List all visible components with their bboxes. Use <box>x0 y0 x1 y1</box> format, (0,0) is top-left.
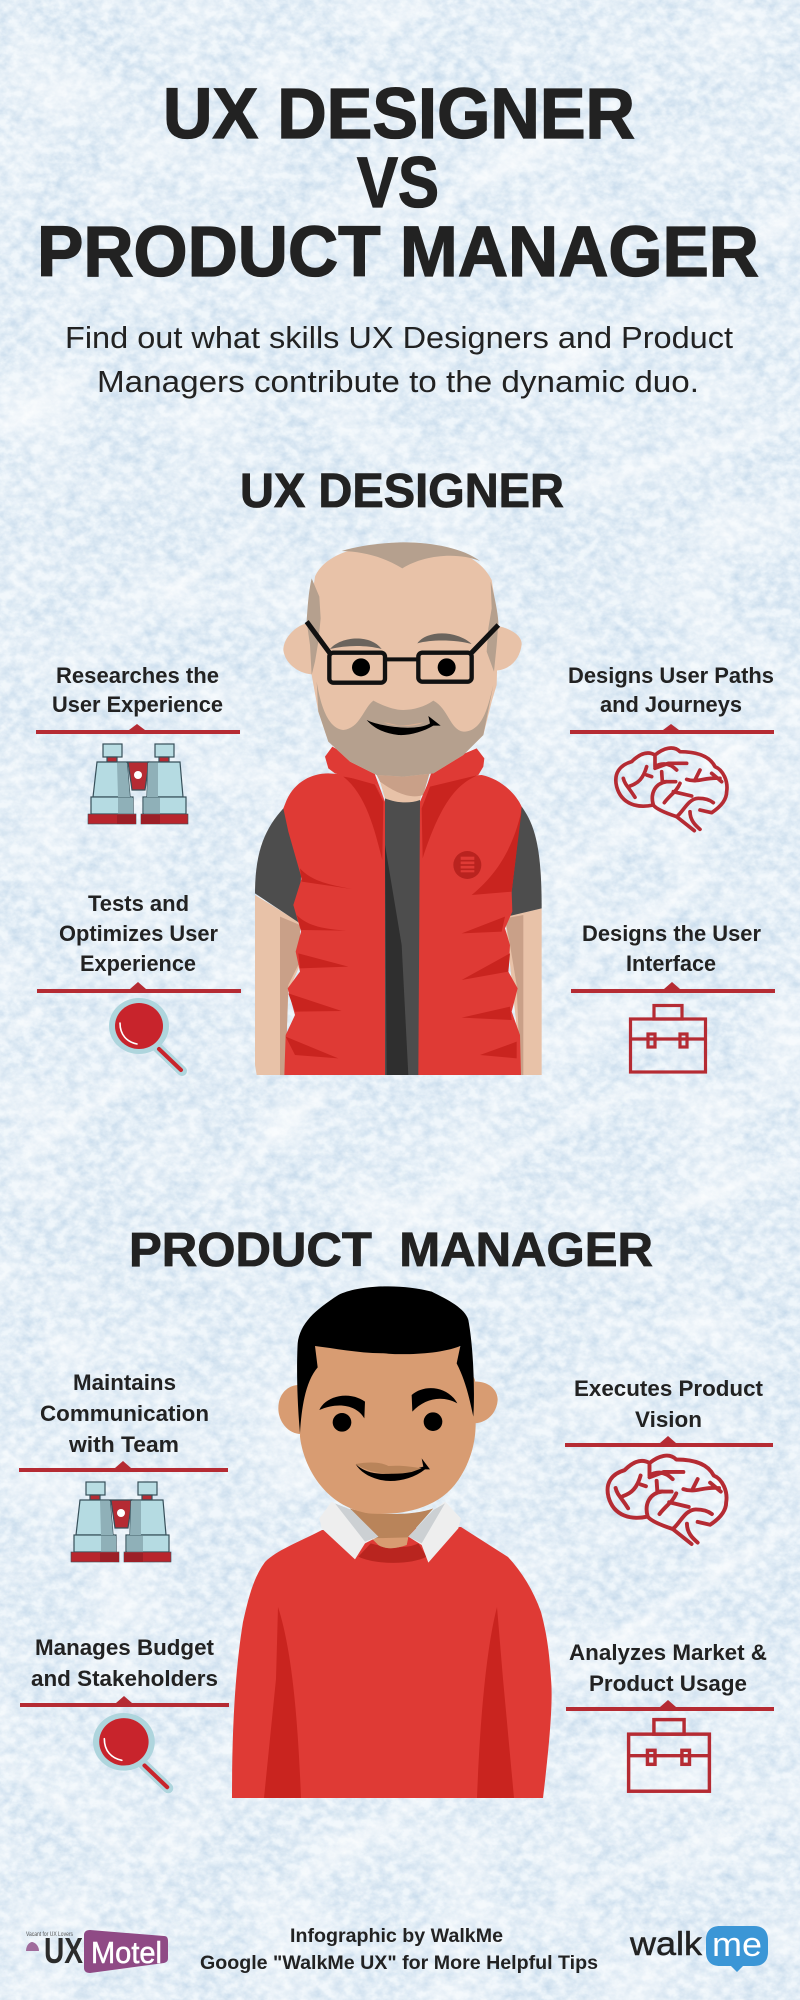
callout: Designs the User Interface <box>571 921 775 1072</box>
title <box>37 75 759 292</box>
callout: Tests and Optimizes User Experience: Experience <box>80 951 196 976</box>
footer credit: Infographic by WalkMe <box>290 1926 503 1947</box>
callout: Manages Budget and Stakeholders <box>20 1635 229 1788</box>
callout: Maintains Communication with Team: Communication <box>40 1401 209 1426</box>
head <box>283 542 522 777</box>
subtitle: Managers contribute to the dynamic duo. <box>97 364 699 399</box>
callout: Analyzes Market & Product Usage: Analyzes Market & <box>569 1640 767 1665</box>
callout: Designs the User Interface: Interface <box>626 951 716 976</box>
mouth <box>367 716 441 735</box>
callout: Executes Product Vision <box>565 1376 773 1544</box>
character: UX designer <box>255 542 542 1075</box>
subtitle: Find out what skills UX Designers and Product <box>65 320 733 355</box>
callout: Tests and Optimizes User Experience <box>37 891 241 1071</box>
title: PRODUCT MANAGER <box>37 213 759 292</box>
callout: Executes Product Vision: Vision <box>635 1407 702 1432</box>
vest badge <box>453 851 481 879</box>
subtitle <box>65 320 733 399</box>
body: arms, shirt and vest <box>255 747 542 1075</box>
icon: briefcase <box>629 1720 709 1791</box>
logo: WalkMe: me <box>712 1926 762 1964</box>
icon: brain <box>608 1456 727 1544</box>
callout: Researches the User Experience: Researches the <box>56 663 219 688</box>
mouth <box>356 1458 430 1481</box>
icon: magnifier <box>109 998 182 1071</box>
icon: binoculars <box>88 744 188 824</box>
logo: WalkMe: walk <box>629 1925 703 1962</box>
callout: Manages Budget and Stakeholders: Manages Budget <box>35 1635 215 1660</box>
logo: UX Motel: Motel <box>91 1935 162 1970</box>
title: VS <box>357 144 439 223</box>
footer credit <box>200 1926 598 1974</box>
callout: Maintains Communication with Team: with Team <box>68 1432 179 1457</box>
glasses <box>307 622 498 683</box>
eyes <box>333 1412 442 1432</box>
sweater <box>232 1527 552 1798</box>
callout: Tests and Optimizes User Experience: Tests and <box>88 891 189 916</box>
logo: UX Motel: UX <box>44 1930 83 1971</box>
callout: Designs User Paths and Journeys <box>568 663 774 831</box>
icon: binoculars <box>71 1482 171 1562</box>
title: UX DESIGNER <box>163 75 635 154</box>
character: product manager <box>232 1286 552 1798</box>
callout: Manages Budget and Stakeholders: and Stakeholders <box>31 1666 218 1691</box>
hair <box>297 1286 474 1433</box>
callout: Analyzes Market & Product Usage <box>566 1640 774 1791</box>
collar <box>319 1502 461 1563</box>
logo: UX Motel <box>26 1930 168 1973</box>
icon: briefcase <box>630 1006 706 1072</box>
head and collar <box>278 1286 498 1563</box>
callout: Designs User Paths and Journeys: and Journeys <box>600 692 742 717</box>
eyebrows <box>330 633 472 649</box>
callout: Designs User Paths and Journeys: Designs User Paths <box>568 663 774 688</box>
callout: Executes Product Vision: Executes Product <box>574 1376 764 1401</box>
footer credit: Google "WalkMe UX" for More Helpful Tips <box>200 1953 598 1974</box>
eyebrows <box>319 1388 457 1418</box>
logo: WalkMe <box>629 1925 768 1972</box>
callout: Designs the User Interface: Designs the User <box>582 921 761 946</box>
eyes <box>352 658 456 676</box>
callout: Maintains Communication with Team <box>19 1370 228 1562</box>
heading: Product Manager: PRODUCT MANAGER <box>129 1224 653 1277</box>
face <box>300 1343 476 1514</box>
heading: UX Designer: UX DESIGNER <box>240 465 564 518</box>
logo: UX Motel: Vacant for UX Lovers <box>26 1932 73 1938</box>
callout: Analyzes Market & Product Usage: Product Usage <box>589 1671 747 1696</box>
callout: Researches the User Experience: User Experience <box>52 692 223 717</box>
icon: magnifier <box>93 1713 168 1788</box>
callout: Tests and Optimizes User Experience: Optimizes User <box>59 921 218 946</box>
icon: brain <box>616 748 727 831</box>
callout: Maintains Communication with Team: Maintains <box>73 1370 176 1395</box>
callout: Researches the User Experience <box>36 663 240 824</box>
